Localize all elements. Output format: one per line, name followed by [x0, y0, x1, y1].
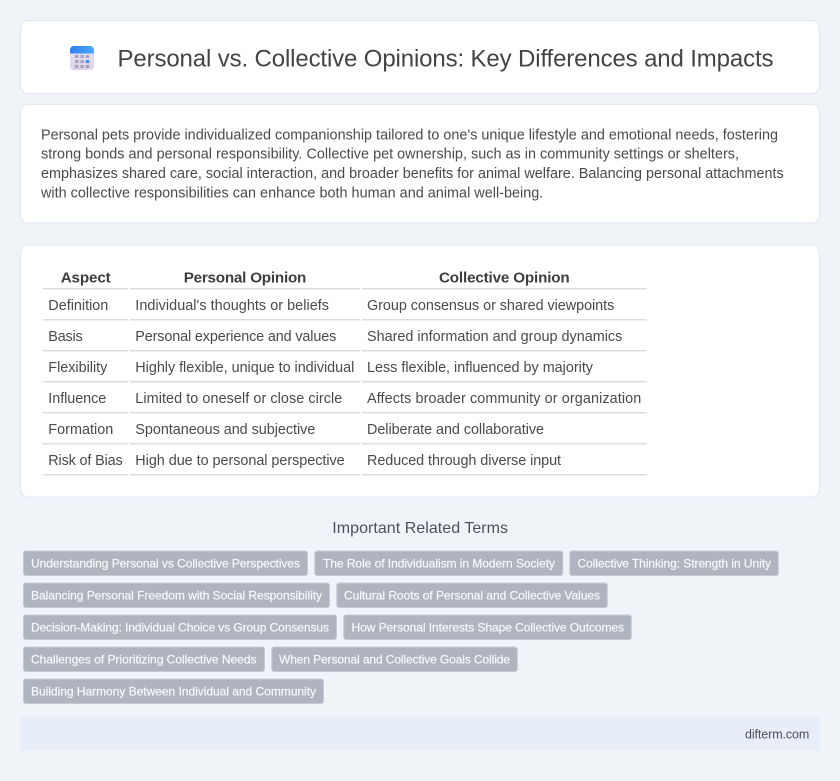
row: flexibility: Less flexible, influenced by majority [367, 360, 594, 376]
tag: When Personal and Collective Goals Collide [279, 652, 510, 666]
row: basis: Basis [48, 329, 83, 345]
tag [272, 647, 517, 672]
tag [570, 551, 778, 576]
tag [24, 583, 330, 608]
tag: The Role of Individualism in Modern Society [323, 556, 555, 570]
table header [43, 270, 647, 290]
text block: intro paragraph [40, 127, 784, 201]
tag: Building Harmony Between Individual and Community [31, 684, 316, 698]
tag: Understanding Personal vs Collective Perspectives [31, 556, 300, 570]
row: basis [43, 329, 647, 352]
row: formation: Spontaneous and subjective [135, 422, 315, 438]
tag [344, 615, 631, 640]
tag [315, 551, 563, 576]
panel: comparison table [20, 245, 820, 497]
row: flexibility: Flexibility [48, 360, 108, 376]
tag: Cultural Roots of Personal and Collective Values [344, 588, 600, 602]
row: definition: Definition [48, 298, 108, 314]
tag: How Personal Interests Shape Collective Outcomes [352, 620, 624, 634]
row: influence: Affects broader community or organization [367, 391, 641, 407]
footer [20, 717, 820, 751]
row: formation [43, 422, 647, 444]
row: definition: Individual's thoughts or beliefs [135, 298, 329, 314]
text block: intro paragraph: strong bonds and personal responsibility. Collective pet ownership, such as in community settings or shelters, [41, 147, 739, 163]
table header: Personal Opinion [184, 270, 306, 287]
tag [24, 551, 308, 576]
tag [24, 615, 336, 640]
tag [337, 583, 607, 608]
tag: Balancing Personal Freedom with Social Responsibility [31, 588, 322, 602]
table header: Collective Opinion [439, 270, 570, 287]
title: Personal vs. Collective Opinions: Key Differences and Impacts [118, 46, 774, 72]
related terms tags [24, 551, 778, 704]
text block: intro paragraph: with collective responsibilities can enhance both human and animal well-being. [40, 185, 543, 201]
row: basis: Personal experience and values [135, 329, 336, 345]
tag: Decision-Making: Individual Choice vs Group Consensus [31, 620, 329, 634]
row: flexibility: Highly flexible, unique to individual [135, 360, 354, 376]
heading: important related terms: Important Related Terms [332, 520, 508, 537]
row: influence: Influence [48, 391, 106, 407]
row: definition: Group consensus or shared viewpoints [367, 298, 614, 314]
tag [24, 679, 324, 704]
table header: Aspect [61, 270, 111, 287]
tag: Challenges of Prioritizing Collective Needs [31, 652, 256, 666]
row: formation: Deliberate and collaborative [367, 422, 544, 438]
row: risk of bias: High due to personal perspective [135, 453, 345, 469]
text block: intro paragraph: Personal pets provide individualized companionship tailored to one's unique lifestyle and emotional needs, fostering [41, 127, 778, 143]
row: influence [43, 391, 647, 414]
row: definition [43, 298, 647, 320]
row: risk of bias: Risk of Bias [48, 453, 123, 469]
panel: intro text [20, 104, 820, 223]
footer: site name: difterm.com [745, 727, 809, 741]
row: risk of bias: Reduced through diverse input [367, 453, 561, 469]
row: formation: Formation [48, 422, 113, 438]
tag: Collective Thinking: Strength in Unity [578, 556, 771, 570]
panel: header [20, 20, 820, 94]
row: flexibility [43, 360, 647, 382]
row: influence: Limited to oneself or close circle [135, 391, 342, 407]
row: risk of bias [43, 453, 647, 476]
row: basis: Shared information and group dynamics [367, 329, 622, 345]
icon: calendar [70, 46, 94, 70]
text block: intro paragraph: emphasizes shared care, social interaction, and broader benefits for animal welfare. Balancing personal attachments [41, 166, 784, 182]
tag [24, 647, 264, 672]
